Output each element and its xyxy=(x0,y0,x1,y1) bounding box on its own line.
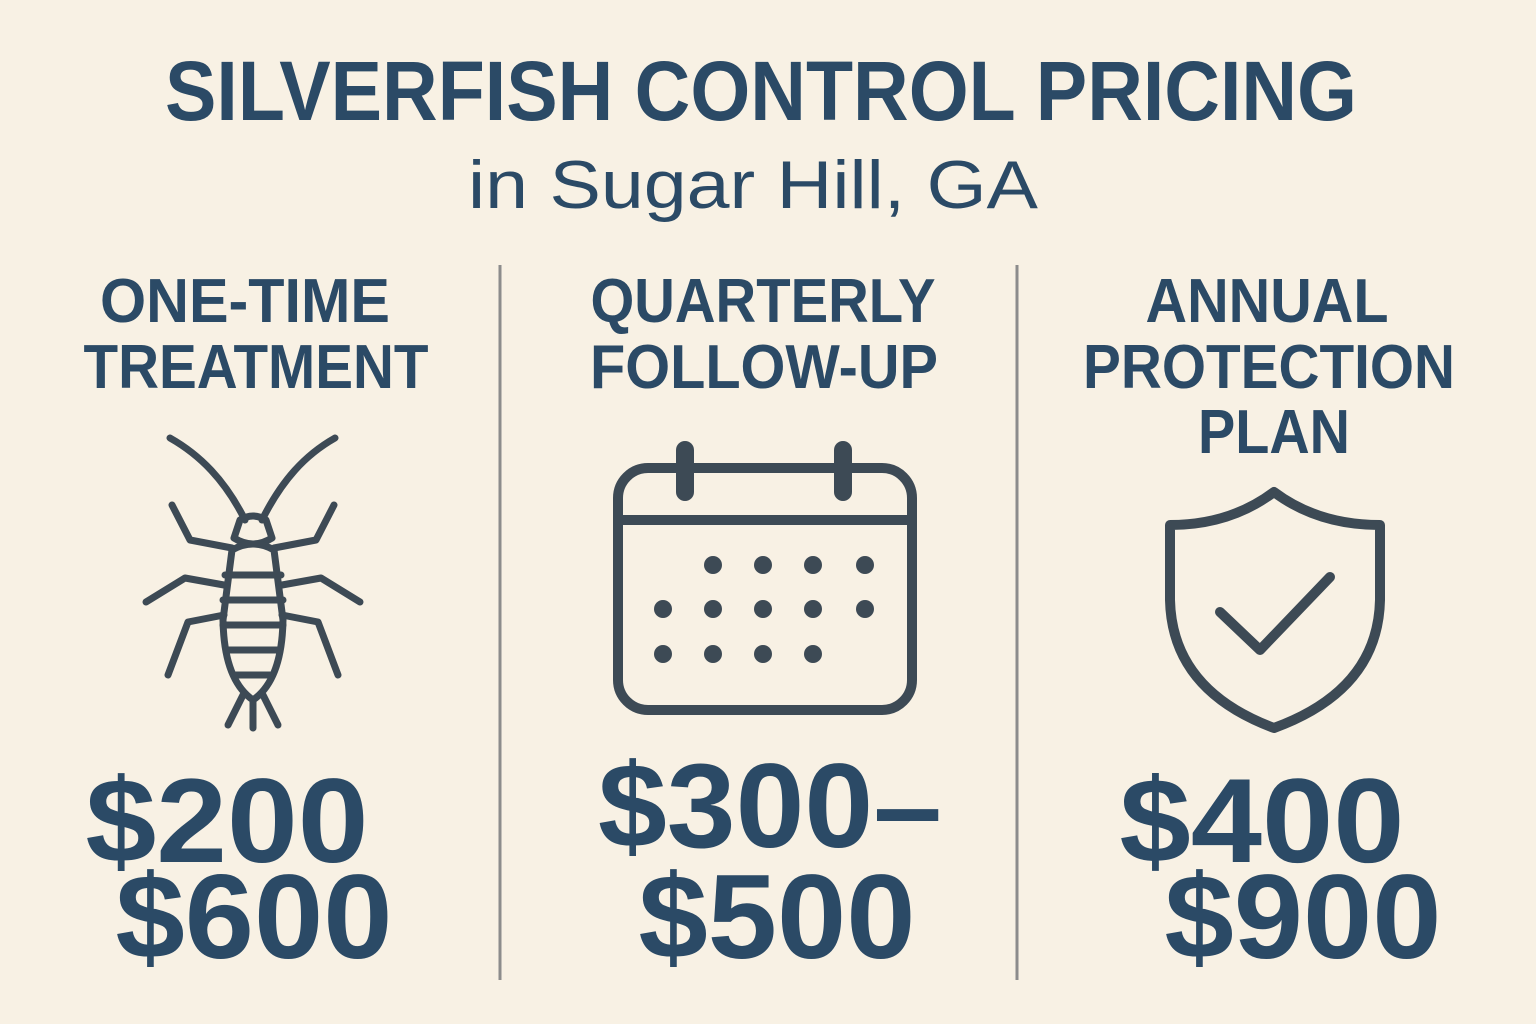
panel: one-time treatment xyxy=(84,267,429,984)
heading: one-time treatment: TREATMENT xyxy=(84,333,429,402)
price: $400-$900: $900 xyxy=(1164,850,1442,984)
heading: annual protection plan: PLAN xyxy=(1198,398,1350,467)
heading: one-time treatment: ONE-TIME xyxy=(100,267,390,336)
icon: calendar xyxy=(618,450,912,710)
price: $300-$500: $300– xyxy=(598,739,942,873)
heading: quarterly follow-up: QUARTERLY xyxy=(590,267,936,336)
price: $400-$900: $400 xyxy=(1120,754,1404,888)
heading: quarterly follow-up: FOLLOW-UP xyxy=(590,333,938,402)
price: $200-$600: $600 xyxy=(116,850,392,984)
price: $400-$900 xyxy=(1120,754,1442,984)
price: $200-$600 xyxy=(86,754,392,984)
heading: annual protection plan: ANNUAL xyxy=(1146,267,1388,336)
heading: annual protection plan: PROTECTION xyxy=(1083,333,1455,402)
subtitle: in Sugar Hill, GA xyxy=(468,147,1039,223)
heading: annual protection plan xyxy=(1083,267,1455,467)
heading: quarterly follow-up xyxy=(590,267,938,402)
price: $300-$500 xyxy=(598,739,942,984)
title: SILVERFISH CONTROL PRICING xyxy=(165,44,1357,138)
price: $200-$600: $200 xyxy=(86,754,368,888)
icon: shield with check xyxy=(1170,492,1380,728)
panel: quarterly follow-up xyxy=(590,267,942,984)
panel: annual protection plan xyxy=(1083,267,1455,984)
heading: one-time treatment xyxy=(84,267,429,402)
price: $300-$500: $500 xyxy=(638,850,916,984)
icon: silverfish xyxy=(146,438,360,728)
